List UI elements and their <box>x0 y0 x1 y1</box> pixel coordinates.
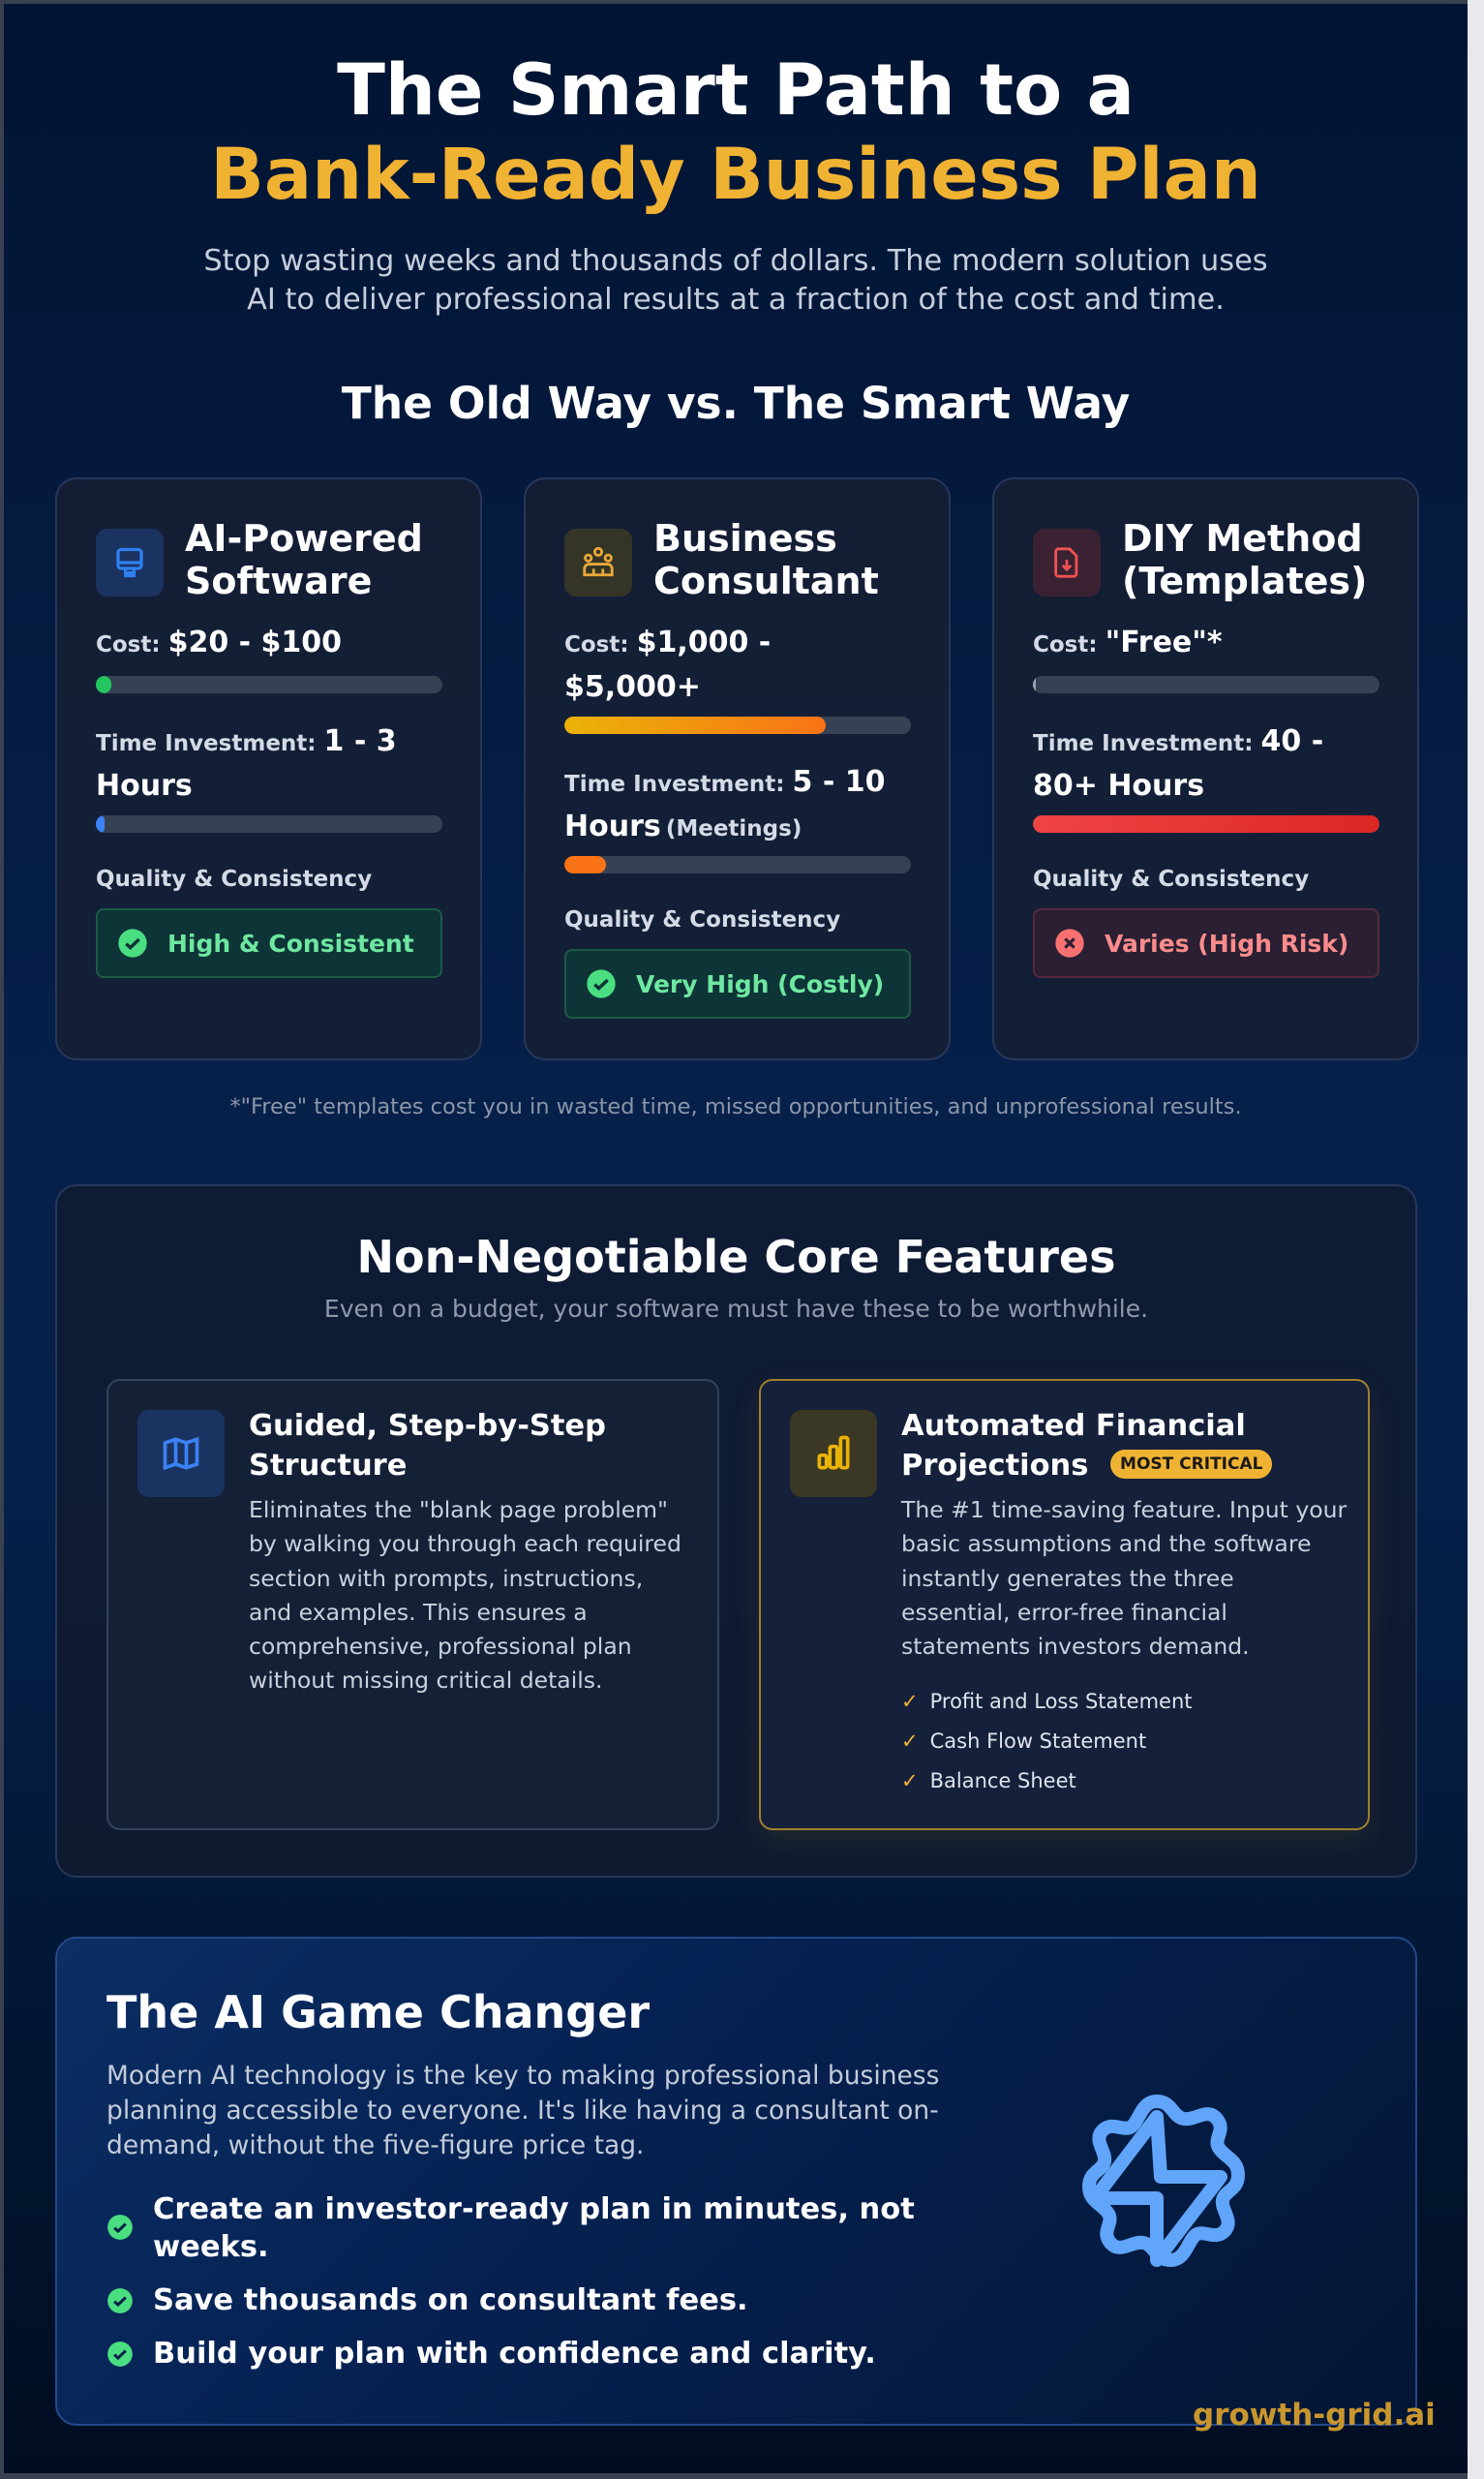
subtitle: AI to deliver professional results at a fraction of the cost and time. <box>247 283 1225 317</box>
benefits list <box>107 2192 915 2371</box>
quality label: Quality & Consistency <box>1033 867 1309 892</box>
panel: Business Consultant <box>524 477 951 1060</box>
quality label: Quality & Consistency <box>96 867 372 892</box>
cost: $5,000+ <box>564 670 701 704</box>
card title: DIY Method <box>1122 517 1363 560</box>
AI paragraph: Modern AI technology is the key to making professional business planning accessible to everyone. It's like having a consultant on-demand, without the five-figure price tag. <box>106 2061 939 2160</box>
feature text: Eliminates the "blank page problem" by walking you through each required section with prompts, instructions, and examples. This ensures a comprehensive, professional plan without missing critical details. <box>249 1496 681 1694</box>
feature text: basic assumptions and the software <box>901 1530 1311 1557</box>
card title <box>1122 517 1367 602</box>
title: The Smart Path to a <box>337 49 1135 132</box>
panel: AI-Powered Software <box>55 477 482 1060</box>
feature text <box>900 1496 1348 1660</box>
cost bar <box>96 676 442 693</box>
footer brand: growth-grid.ai <box>1193 2398 1436 2433</box>
feature text: The #1 time-saving feature. Input your <box>901 1496 1347 1523</box>
feature title: MOST CRITICAL <box>1120 1454 1262 1474</box>
card title: Software <box>185 560 372 602</box>
feature title: Structure <box>249 1449 407 1483</box>
badge: very high <box>564 949 911 1019</box>
benefits list: Save thousands on consultant fees. <box>153 2283 748 2317</box>
checklist <box>901 1690 1193 1792</box>
features subtitle: Even on a budget, your software must have these to be worthwhile. <box>324 1295 1148 1323</box>
time: Time Investment: 5 - 10 <box>564 765 885 799</box>
feature card: guided <box>106 1379 719 1830</box>
time: Hours <box>96 769 193 803</box>
checklist: ✓ Balance Sheet <box>901 1769 1076 1792</box>
icon: file download <box>1033 529 1101 597</box>
feature title: Projections <box>901 1449 1088 1483</box>
card title: (Templates) <box>1122 560 1367 602</box>
feature title <box>901 1409 1272 1483</box>
time <box>96 724 397 803</box>
time: 80+ Hours <box>1033 769 1204 803</box>
footnote: *"Free" templates cost you in wasted time, missed opportunities, and unprofessional results. <box>229 1094 1242 1119</box>
panel: AI game changer <box>55 1937 1417 2426</box>
badge: varies <box>1033 908 1379 978</box>
badge: high: High & Consistent <box>167 930 414 957</box>
cost bar <box>1033 676 1379 693</box>
subtitle <box>203 244 1268 317</box>
card title: Consultant <box>653 560 879 602</box>
badge: varies: Varies (High Risk) <box>1105 930 1348 957</box>
cost <box>564 626 771 704</box>
feature text: statements investors demand. <box>901 1633 1250 1660</box>
features heading: Non-Negotiable Core Features <box>357 1231 1115 1283</box>
quality label: Quality & Consistency <box>564 907 840 933</box>
time: Time Investment: 1 - 3 <box>96 724 397 758</box>
badge: high <box>96 908 442 978</box>
icon: AI bolt gear <box>1082 2095 1245 2267</box>
card title: Business <box>653 517 837 560</box>
card title <box>653 517 879 602</box>
benefits list: Build your plan with confidence and clarity. <box>153 2337 876 2371</box>
cost: Cost: $1,000 - <box>564 626 771 659</box>
checklist: ✓ Cash Flow Statement <box>901 1729 1146 1753</box>
icon: map <box>137 1410 225 1497</box>
time bar <box>564 856 911 873</box>
panel: core features <box>55 1184 1417 1878</box>
time: Time Investment: 40 - <box>1033 724 1323 758</box>
section heading: comparison: The Old Way vs. The Smart Way <box>342 378 1130 429</box>
benefits list: Create an investor-ready plan in minutes, not <box>153 2192 915 2226</box>
benefits list: weeks. <box>153 2230 269 2264</box>
cost: Cost: "Free"* <box>1033 626 1223 659</box>
cost: Cost: $20 - $100 <box>96 626 342 659</box>
feature title <box>249 1409 606 1483</box>
feature text: instantly generates the three <box>901 1565 1234 1592</box>
feature title: Automated Financial <box>901 1409 1246 1443</box>
badge: very high: Very High (Costly) <box>636 970 884 997</box>
panel: DIY Method <box>992 477 1419 1060</box>
time: Hours (Meetings) <box>564 810 802 843</box>
checklist: ✓ Profit and Loss Statement <box>901 1690 1193 1713</box>
AI heading: The AI Game Changer <box>106 1986 650 2038</box>
title: Bank-Ready Business Plan <box>210 134 1261 216</box>
time <box>564 765 885 843</box>
card title: AI-Powered <box>185 517 423 560</box>
time bar <box>96 815 442 833</box>
icon: computer <box>96 529 164 597</box>
subtitle: Stop wasting weeks and thousands of dollars. The modern solution uses <box>203 244 1268 278</box>
feature title: Guided, Step-by-Step <box>249 1409 606 1443</box>
time <box>1033 724 1323 803</box>
feature text: essential, error-free financial <box>901 1599 1227 1626</box>
card title <box>185 517 423 602</box>
icon: people <box>564 529 632 597</box>
title <box>210 49 1261 216</box>
feature card: financial projections <box>759 1379 1370 1830</box>
time bar <box>1033 815 1379 833</box>
cost bar <box>564 717 911 734</box>
icon: bar chart <box>790 1410 877 1497</box>
